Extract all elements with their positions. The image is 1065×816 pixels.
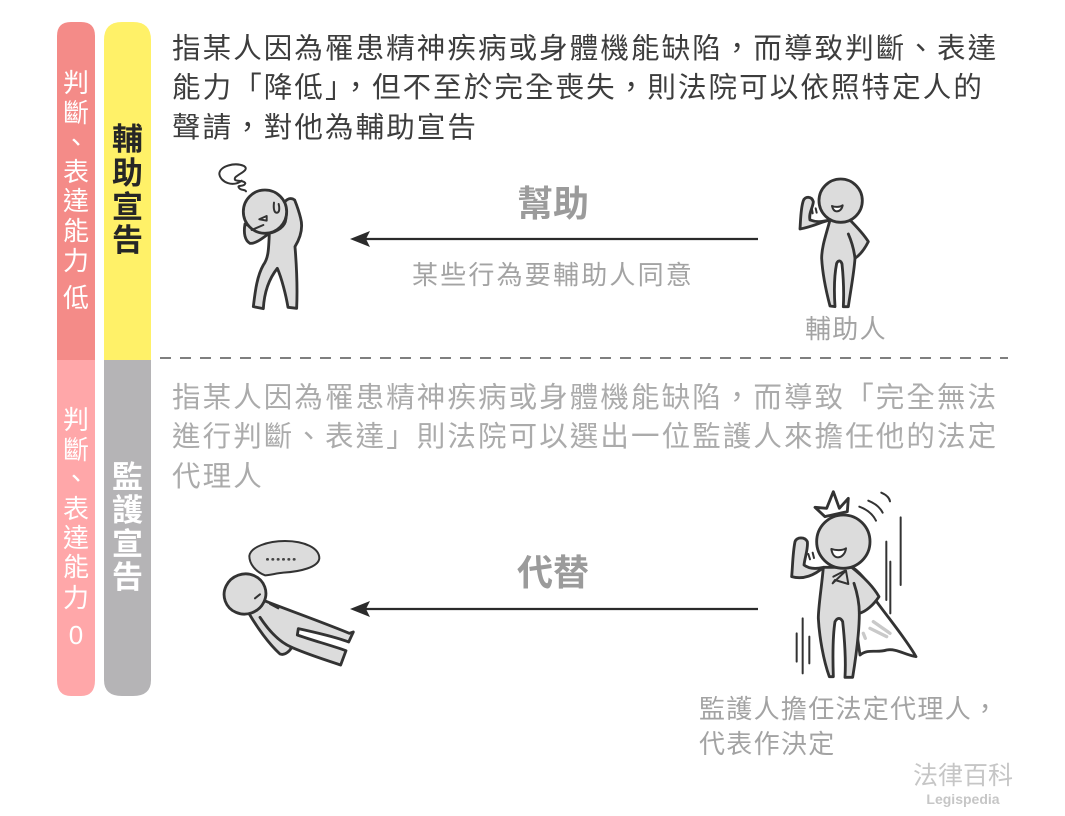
panel: gray bar, guardianship declaration [104,360,151,696]
panel: pink side bar, judgement ability zero [57,360,95,696]
icon: crowned guardian with cape [792,492,916,677]
text block: assistance definition [172,33,998,144]
panel: yellow bar, assistance declaration [104,22,151,360]
label: assistance declaration: 輔助宣告 [112,122,143,258]
caption: some acts need consent: 某些行為要輔助人同意 [412,260,694,290]
icon: confused person [219,164,302,309]
icon: flexing assistant [800,179,868,307]
logo: Legispedia [913,762,1013,807]
label: guardianship declaration: 監護宣告 [112,460,143,595]
crown [815,492,848,517]
logo: Legispedia: 法律百科 [913,762,1013,790]
text block: assistance definition: 能力「降低」，但不至於完全喪失，則法院可以依照特定人的 [172,72,984,104]
label: substitute action: 代替 [517,552,589,593]
icon: person lying down with speech bubble [218,541,353,665]
arrow: help, pointing left [350,231,758,247]
caption: guardian acts as legal representative: 監護人擔任法定代理人， [699,694,999,724]
text block: assistance definition: 聲請，對他為輔助宣告 [172,112,478,144]
text block: guardianship definition: 代理人 [172,461,264,493]
cape [852,567,916,657]
label: help action: 幫助 [517,183,589,224]
divider [160,357,1008,359]
label: ability zero: 判斷、表達能力0 [63,405,89,650]
text block: guardianship definition [172,382,998,493]
caption: assistant: 輔助人 [805,314,887,344]
label: ability low: 判斷、表達能力低 [63,68,89,313]
logo: Legispedia: Legispedia [926,791,1000,807]
text block: guardianship definition: 進行判斷、表達」則法院可以選出一位監護人來擔任他的法定 [172,421,998,453]
text block: assistance definition: 指某人因為罹患精神疾病或身體機能缺陷，而導致判斷、表達 [172,33,998,65]
panel: pink side bar, judgement ability low [57,22,95,360]
caption: guardian acts as legal representative: 代表作決定 [699,729,836,759]
arrow: substitute, pointing left [350,601,758,617]
speech bubble [249,541,319,575]
caption: guardian acts as legal representative [699,694,999,759]
text block: guardianship definition: 指某人因為罹患精神疾病或身體機能缺陷，而導致「完全無法 [172,382,998,414]
